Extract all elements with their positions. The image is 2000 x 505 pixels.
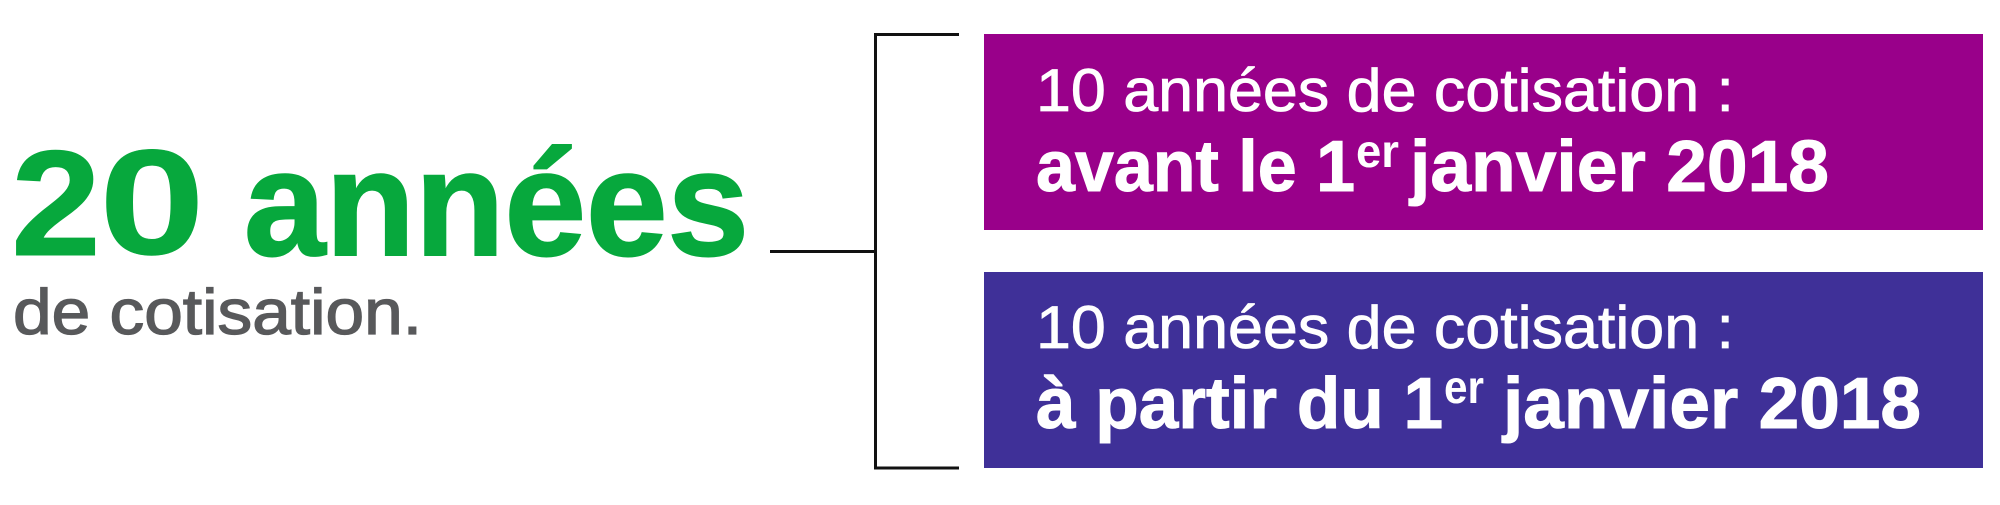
- text: à partir du 1er janvier 2018: janvier 2018: [1501, 364, 1921, 444]
- text: 10 années de cotisation: 10 années de cotisation :: [1036, 57, 1734, 124]
- text: à partir du 1er janvier 2018: [1036, 361, 1921, 444]
- heading: 20 années: 2: [11, 119, 101, 287]
- panel background: indigo: [984, 272, 1983, 468]
- panel background: magenta: [984, 34, 1983, 230]
- subheading: de cotisation: de cotisation.: [13, 276, 422, 348]
- text: à partir du 1er janvier 2018: à partir du 1: [1036, 364, 1443, 444]
- text: avant le 1er janvier 2018: janvier 2018: [1408, 127, 1829, 207]
- text: 10 années de cotisation: 10 années de cotisation :: [1036, 294, 1734, 361]
- text: avant le 1er janvier 2018: er: [1356, 125, 1399, 177]
- text: avant le 1er janvier 2018: avant le 1: [1036, 127, 1355, 207]
- text: à partir du 1er janvier 2018: er: [1444, 361, 1484, 413]
- heading: 20 années: [11, 118, 749, 287]
- panel: before 2018: [984, 34, 1983, 230]
- bracket connector: [770, 34, 959, 468]
- text: avant le 1er janvier 2018: [1036, 125, 1829, 207]
- heading: 20 années: 0: [99, 118, 205, 286]
- heading: 20 années: années: [244, 119, 749, 287]
- panel: from 2018: [984, 272, 1983, 468]
